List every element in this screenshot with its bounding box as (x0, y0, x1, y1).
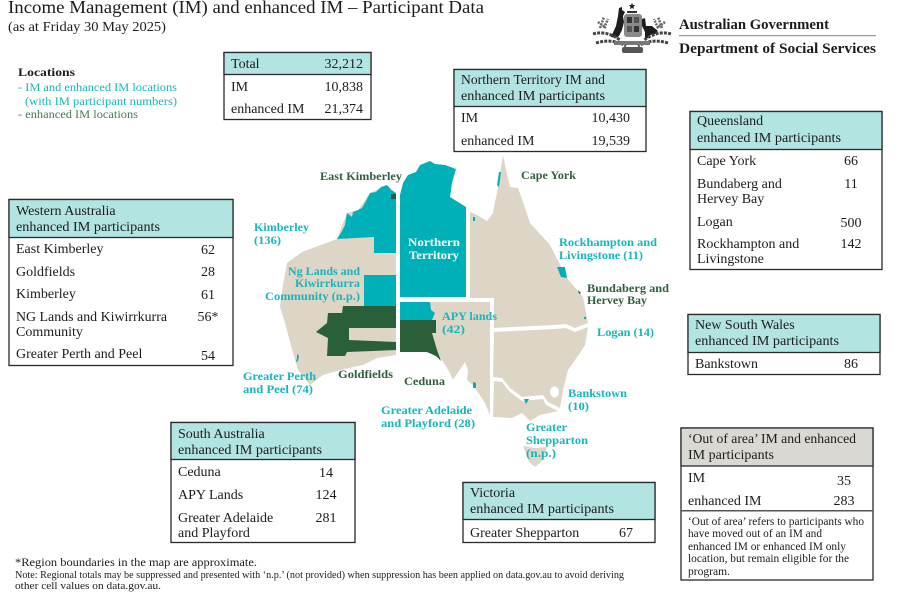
panel: Queensland: enhanced IM participants (697, 131, 841, 146)
map label: Bundaberg and Hervey Bay: Bundaberg and (587, 281, 669, 295)
map label: Rockhampton and Livingstone (559, 235, 657, 262)
map: Rockhampton and Livingstone region (557, 267, 567, 278)
map: Logan region (584, 317, 586, 319)
panel: Western Australia: Community (16, 325, 83, 340)
panel: South Australia: South Australia (178, 427, 266, 442)
panel: South Australia: 124 (316, 488, 336, 503)
logo: Australian Government wordmark: Australian Government (679, 17, 829, 33)
map: Greater Perth region (296, 354, 299, 362)
panel: New South Wales: Bankstown (695, 357, 758, 372)
panel: Western Australia: 54 (201, 349, 215, 364)
panel: Western Australia: Goldfields (16, 265, 75, 280)
panel: Northern Territory: 19,539 (592, 134, 630, 149)
map: NG Lands region (364, 275, 396, 306)
panel: Queensland: Rockhampton and (697, 237, 799, 252)
map label: APY lands: (42) (442, 322, 465, 336)
panel: total: 21,374 (324, 102, 363, 117)
map: Greater Adelaide region (473, 382, 476, 388)
legend: locations: - enhanced IM locations (18, 107, 138, 121)
panel: Northern Territory: 10,430 (592, 111, 630, 126)
panel: total: 10,838 (324, 80, 363, 95)
panel: Queensland: Hervey Bay (697, 192, 764, 207)
map label: Bankstown: (10) (568, 399, 589, 413)
panel: Northern Territory: IM (461, 111, 479, 126)
panel: Victoria: Greater Shepparton (470, 526, 579, 541)
panel: Queensland: Livingstone (697, 252, 764, 267)
map label: Kimberley: (136) (254, 233, 281, 247)
logo: Department of Social Services wordmark: Department of Social Services (679, 41, 876, 57)
map label: Greater Perth and Peel (243, 369, 316, 396)
map: Queensland (470, 155, 588, 328)
map label: APY lands: APY lands (442, 309, 497, 323)
map label: Ng Lands (265, 264, 360, 303)
map label: Greater Perth and Peel: Greater Perth (243, 369, 316, 383)
map label: Cape York: Cape York (521, 168, 576, 182)
map: Greater Shepparton region (524, 399, 529, 404)
map label: Greater Perth and Peel: and Peel (74) (243, 382, 313, 396)
map: Queensland inland region (473, 217, 475, 221)
panel: Western Australia: Greater Perth and Peel (16, 347, 142, 362)
map: Western Australia (280, 185, 396, 385)
panel: out of area: have moved out of an IM and (688, 528, 822, 540)
panel: Queensland: Queensland (697, 114, 763, 129)
panel: Northern Territory: Northern Territory IM and (461, 73, 605, 88)
panel: South Australia: APY Lands (178, 488, 243, 503)
panel: out of area: 35 (837, 474, 851, 489)
panel: out of area: IM (688, 471, 706, 486)
panel: South Australia: 14 (319, 466, 333, 481)
panel: Northern Territory: enhanced IM (461, 134, 535, 149)
panel: Western Australia: Western Australia (16, 204, 116, 219)
map: East Kimberley region (391, 194, 396, 199)
panel: Queensland: 11 (844, 177, 858, 192)
map label: Kimberley: Kimberley (254, 220, 309, 234)
map label: Rockhampton and Livingstone: Rockhampton and (559, 235, 657, 249)
map label: Greater Adelaide and Playford (381, 403, 475, 430)
map: Tasmania (523, 446, 547, 467)
panel: Queensland (690, 112, 882, 270)
map: Ceduna region (400, 320, 441, 361)
panel: South Australia (171, 422, 355, 542)
map: South Australia (400, 302, 490, 415)
panel: out of area (681, 428, 873, 580)
map label: Northern Territory (408, 235, 460, 262)
panel: total (224, 52, 371, 120)
panel: Western Australia: East Kimberley (16, 242, 103, 257)
panel: Queensland: 500 (840, 216, 862, 231)
panel: out of area: IM participants (688, 448, 774, 463)
legend: locations: Locations (18, 65, 75, 79)
subtitle date: (as at Friday 30 May 2025) (8, 20, 166, 35)
logo: Australian Government crest (593, 3, 671, 53)
panel: Victoria: Victoria (470, 486, 516, 501)
map label: Goldfields: Goldfields (338, 367, 393, 381)
panel: Western Australia: NG Lands and Kiwirrkurra (16, 310, 168, 325)
map label: Ng Lands: Kiwirrkurra (295, 276, 360, 290)
panel: Western Australia: Kimberley (16, 287, 76, 302)
panel: Victoria (463, 482, 655, 542)
panel: New South Wales: New South Wales (695, 318, 795, 333)
panel: South Australia: Greater Adelaide (178, 511, 273, 526)
panel: Victoria: 67 (619, 526, 633, 541)
map label: Greater Adelaide and Playford: Greater Adelaide (381, 403, 473, 417)
panel: New South Wales (688, 314, 880, 374)
panel: South Australia: and Playford (178, 526, 250, 541)
panel: Northern Territory: enhanced IM participants (461, 89, 605, 104)
panel: out of area: ‘Out of area’ refers to participants who (688, 516, 864, 528)
map label: Logan: Logan (14) (597, 325, 654, 339)
panel: South Australia: 281 (316, 511, 336, 526)
panel: out of area: 283 (834, 494, 854, 509)
footnote: Note: Regional totals may be suppressed and presented with ‘n.p.’ (not provided) when suppression has been applied on data.gov.au to avoid deriving (15, 570, 625, 581)
panel: Queensland: 66 (844, 154, 858, 169)
map label: Bankstown (568, 386, 627, 413)
map label: Ceduna: Ceduna (404, 374, 445, 388)
panel: New South Wales: enhanced IM participants (695, 334, 839, 349)
map: Goldfields region (316, 306, 396, 356)
map: Cape York region (497, 172, 501, 187)
panel: out of area: enhanced IM (688, 494, 762, 509)
panel: Western Australia: 62 (201, 243, 215, 258)
panel: Western Australia: 61 (201, 288, 215, 303)
map label: Bankstown: Bankstown (568, 386, 627, 400)
map label: Greater Shepparton: Shepparton (526, 433, 588, 447)
map label: Ng Lands: Ng Lands and (288, 264, 360, 278)
map label: Greater Adelaide and Playford: and Playford (28) (381, 416, 475, 430)
legend: locations: - IM and enhanced IM locations (18, 80, 177, 94)
legend: locations (18, 65, 177, 121)
panel: out of area: location, but remain eligible for the (688, 553, 849, 565)
panel: total: enhanced IM (231, 102, 305, 117)
panel: Queensland: Logan (697, 215, 733, 230)
panel: Queensland: Cape York (697, 154, 756, 169)
panel: Western Australia (9, 200, 233, 366)
map label: Kimberley (254, 220, 309, 247)
panel: Western Australia: 56* (198, 310, 218, 325)
panel: out of area: ‘Out of area’ IM and enhanced (688, 432, 856, 447)
panel: Western Australia: enhanced IM participants (16, 220, 160, 235)
map label: Northern Territory: Northern (408, 235, 460, 249)
panel: total: 32,212 (324, 57, 363, 72)
panel: Victoria: enhanced IM participants (470, 502, 614, 517)
footnote (15, 555, 625, 592)
panel: Northern Territory (454, 70, 646, 152)
map: Northern Territory (400, 161, 466, 297)
map: Kimberley region (337, 185, 396, 253)
panel: South Australia: Ceduna (178, 465, 222, 480)
panel: Queensland: Bundaberg and (697, 177, 782, 192)
map label: Bundaberg and Hervey Bay: Hervey Bay (587, 293, 647, 307)
panel: South Australia: enhanced IM participants (178, 443, 322, 458)
panel: total: Total (231, 57, 260, 72)
panel: total: IM (231, 80, 249, 95)
map of Australia (280, 155, 588, 467)
panel: New South Wales: 86 (844, 357, 858, 372)
map label: Greater Shepparton: (n.p.) (526, 446, 556, 460)
panel: Western Australia: 28 (201, 265, 215, 280)
map label: Northern Territory: Territory (409, 248, 459, 262)
map label: Greater Shepparton: Greater (526, 420, 568, 434)
map label: East Kimberley: East Kimberley (320, 169, 402, 183)
map label: Bundaberg and Hervey Bay (587, 281, 669, 307)
panel: out of area: enhanced IM or enhanced IM only (688, 541, 846, 553)
footnote: *Region boundaries in the map are approximate. (15, 555, 257, 569)
map label: Greater Shepparton (526, 420, 588, 460)
map: New South Wales (493, 327, 588, 408)
map: Victoria (493, 381, 558, 421)
map: APY lands region (400, 302, 435, 320)
map label: APY lands (442, 309, 497, 336)
map label: Rockhampton and Livingstone: Livingstone (11) (559, 248, 643, 262)
legend: locations: (with IM participant numbers) (25, 94, 177, 108)
footnote: other cell values on data.gov.au. (15, 581, 161, 592)
panel: Queensland: 142 (840, 237, 862, 252)
map: Bundaberg and Hervey Bay region (578, 290, 581, 294)
map label: Ng Lands: Community (n.p.) (265, 289, 360, 303)
panel: out of area: program. (688, 566, 730, 578)
map: ACT (550, 386, 559, 398)
